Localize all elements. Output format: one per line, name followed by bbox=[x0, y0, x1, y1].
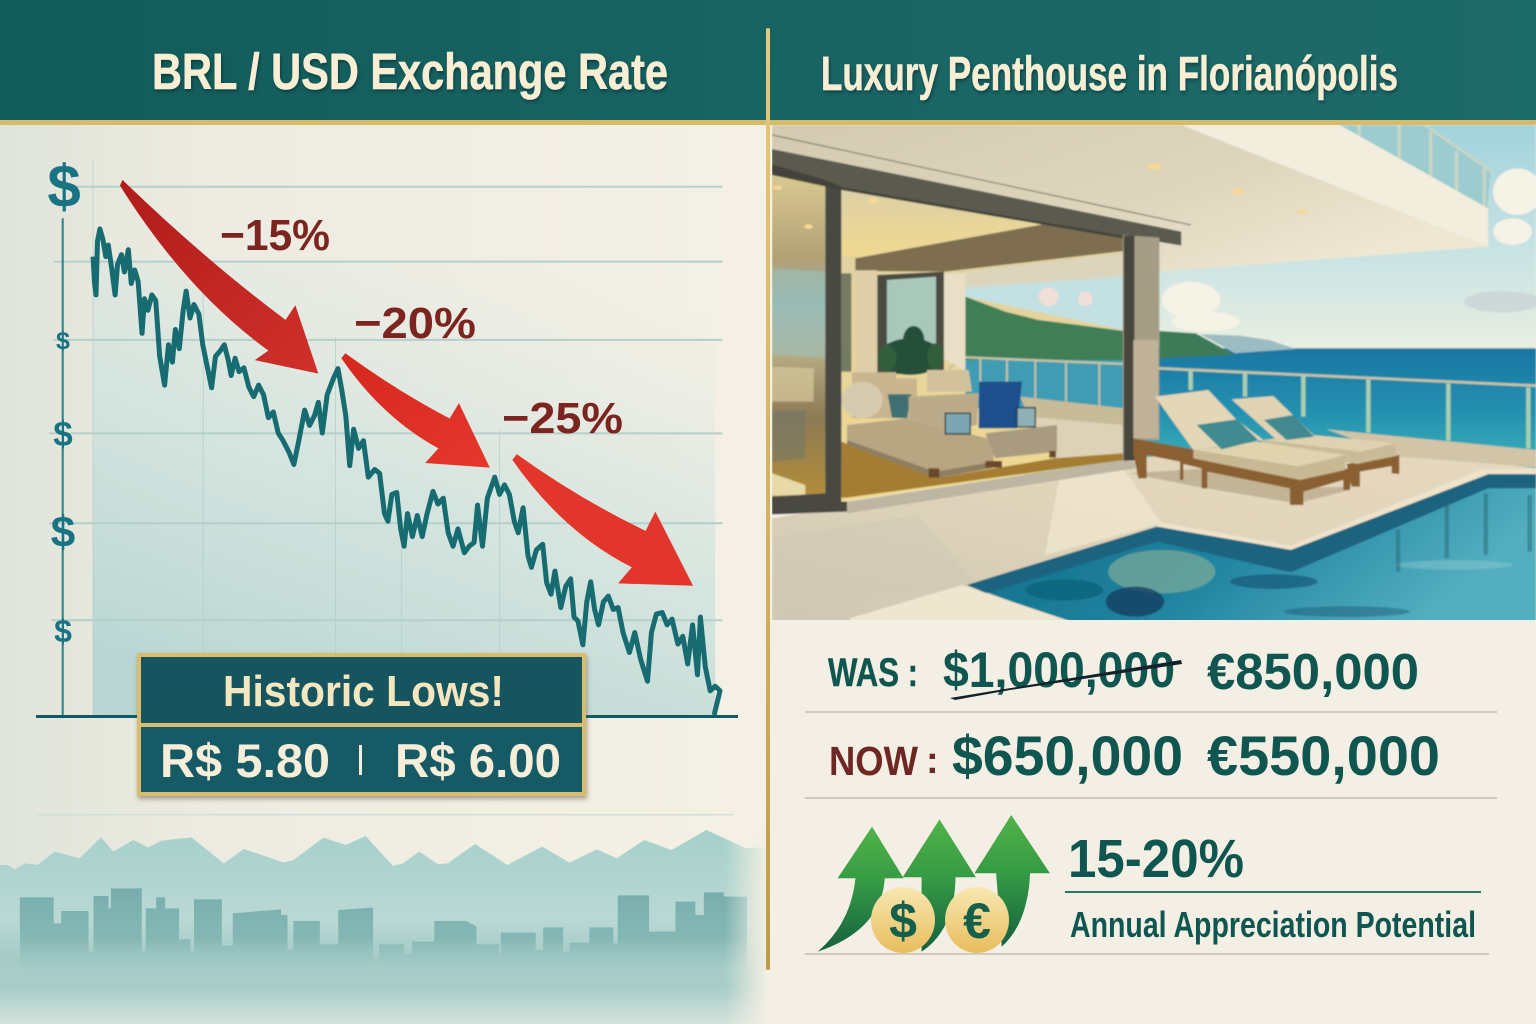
header band bbox=[0, 0, 1536, 125]
icon: dollar coin: $ bbox=[889, 893, 917, 949]
photo: luxury penthouse terrace bbox=[772, 125, 1536, 625]
y axis currency symbols: $ bbox=[47, 153, 81, 220]
interior room bbox=[772, 175, 1135, 514]
icon: green growth arrows bbox=[818, 815, 1050, 952]
falling exchange rate line bbox=[93, 229, 720, 715]
potted plant bbox=[878, 326, 943, 375]
y axis currency symbols: $ bbox=[56, 327, 70, 355]
y axis currency symbols: $ bbox=[51, 508, 75, 557]
was row bbox=[828, 642, 1419, 700]
label: minus 15 percent: −15% bbox=[220, 211, 330, 260]
icon: euro coin: € bbox=[963, 893, 991, 949]
lounge sofa bbox=[841, 370, 1057, 478]
was row: €850,000 bbox=[1207, 643, 1419, 700]
now row: NOW bbox=[829, 738, 918, 784]
now row: : bbox=[926, 740, 939, 782]
front lounger bbox=[1130, 390, 1352, 505]
red decline arrow 2 bbox=[341, 353, 490, 468]
label: minus 20 percent: −20% bbox=[354, 299, 476, 348]
skyline fade at panel edge bbox=[725, 830, 768, 1024]
chart plot area bbox=[49, 161, 722, 717]
exterior background bbox=[772, 125, 1536, 625]
callout: historic lows bbox=[137, 653, 586, 796]
door mullion bbox=[772, 175, 847, 514]
chart baseline bbox=[36, 715, 738, 718]
icon: euro coin bbox=[945, 887, 1009, 953]
balcony rail and sun loungers bbox=[1130, 340, 1536, 505]
panel: prices bbox=[805, 642, 1497, 799]
rear lounger bbox=[1232, 396, 1399, 487]
callout rate range bbox=[160, 734, 561, 787]
panel: exchange rate chart bbox=[36, 153, 738, 718]
red decline arrow 1 bbox=[120, 180, 318, 374]
was row: WAS : bbox=[828, 651, 918, 695]
y axis currency symbols: $ bbox=[54, 613, 72, 649]
now row: $650,000 bbox=[952, 724, 1183, 787]
slab and fascia bbox=[772, 125, 1492, 462]
left panel background bbox=[0, 124, 768, 1024]
red decline arrow 3 bbox=[512, 454, 693, 586]
swimming pool bbox=[850, 469, 1536, 625]
was row: $1,000,000 bbox=[943, 642, 1175, 698]
callout heading: Historic Lows! bbox=[223, 667, 504, 716]
threshold bbox=[847, 460, 1135, 513]
appreciation percentage: 15-20% bbox=[1068, 829, 1244, 889]
panel: appreciation bbox=[805, 815, 1489, 955]
callout rate range: R$ 6.00 bbox=[395, 734, 561, 787]
left glass door bbox=[772, 175, 825, 497]
y axis currency symbols: $ bbox=[53, 415, 73, 454]
icon: dollar coin bbox=[871, 887, 935, 953]
label: minus 25 percent: −25% bbox=[502, 394, 623, 443]
callout rate range: R$ 5.80 bbox=[160, 734, 330, 787]
now row bbox=[829, 724, 1440, 787]
y axis currency symbols bbox=[47, 153, 81, 649]
now row: €550,000 bbox=[1207, 724, 1440, 787]
heading: exchange rate: BRL / USD Exchange Rate bbox=[152, 43, 668, 100]
skyline decoration bbox=[0, 830, 768, 1024]
centre divider bbox=[766, 28, 770, 970]
